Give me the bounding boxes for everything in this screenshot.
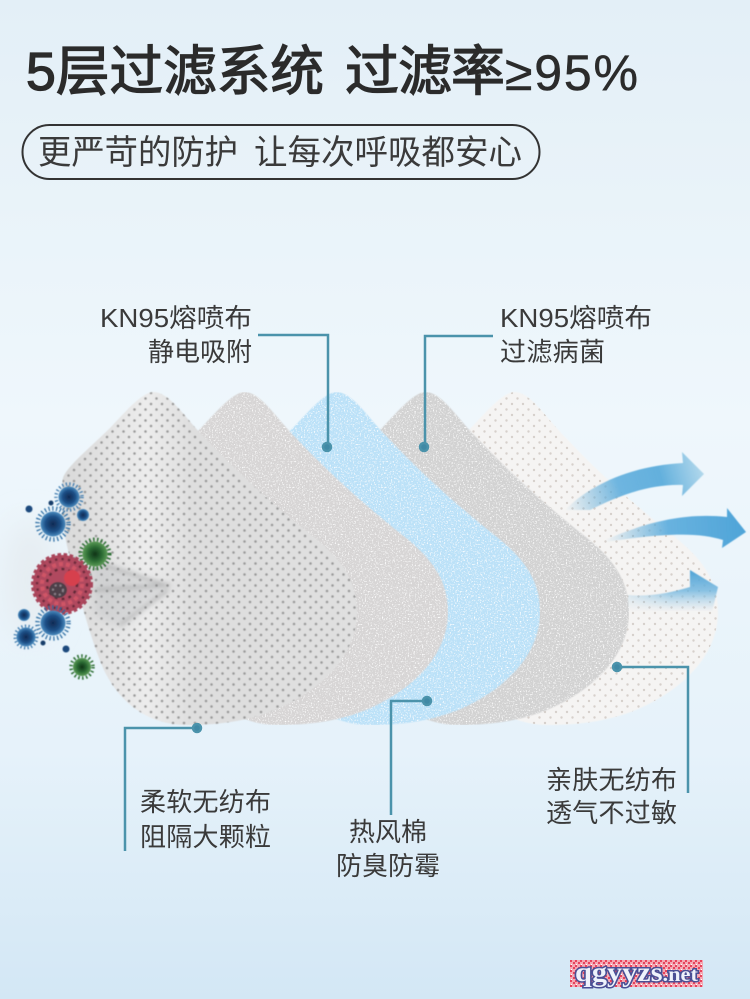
layer 4: KN95 filter xyxy=(334,392,629,725)
layer 3: hot-air cotton xyxy=(245,392,540,725)
label: KN95 filter: KN95熔喷布 xyxy=(500,303,652,333)
subtitle pill: 更严苛的防护 xyxy=(38,134,238,172)
label: skin-friendly non-woven xyxy=(546,765,677,828)
label: KN95 electrostatic: 静电吸附 xyxy=(148,337,252,367)
mask layers xyxy=(62,392,718,725)
label: hot-air cotton: 防臭防霉 xyxy=(336,851,440,881)
subtitle pill xyxy=(22,125,540,179)
connector: layer 5 xyxy=(613,663,688,793)
connector: layer 3 xyxy=(391,697,431,815)
subtitle pill: 让每次呼吸都安心 xyxy=(254,134,522,172)
layer 2: KN95 electrostatic xyxy=(153,392,448,725)
label: KN95 electrostatic xyxy=(100,303,252,367)
label: skin-friendly non-woven: 透气不过敏 xyxy=(546,798,677,828)
label: soft non-woven xyxy=(140,787,271,852)
connector: layer 1 xyxy=(125,724,201,851)
label: soft non-woven: 阻隔大颗粒 xyxy=(140,822,271,852)
label: KN95 filter xyxy=(500,303,652,367)
layer 5: skin-friendly non-woven xyxy=(423,392,718,725)
watermark: qgyyzs .net xyxy=(575,957,698,987)
arrow 2 xyxy=(605,508,746,548)
glow and shadow behind viruses xyxy=(4,520,172,640)
arrow 1 xyxy=(565,452,704,510)
connector: layer 4 xyxy=(420,336,493,451)
title xyxy=(26,42,638,102)
layer 1: soft non-woven xyxy=(62,392,357,725)
blue virus cluster top xyxy=(26,484,89,540)
label: skin-friendly non-woven: 亲肤无纺布 xyxy=(546,765,677,795)
blue virus cluster bottom xyxy=(15,608,70,652)
title: ≥95% xyxy=(505,45,638,101)
label: soft non-woven: 柔软无纺布 xyxy=(140,787,271,817)
arrow 3 xyxy=(628,570,718,612)
label: KN95 filter: 过滤病菌 xyxy=(500,337,605,367)
connector: layer 2 xyxy=(258,335,331,451)
title: 过滤率 xyxy=(345,42,505,102)
green virus top xyxy=(80,540,110,568)
viruses xyxy=(4,484,172,678)
red virus xyxy=(33,555,91,613)
label: hot-air cotton: 热风棉 xyxy=(349,817,427,847)
label: hot-air cotton xyxy=(336,817,440,881)
label: KN95 electrostatic: KN95熔喷布 xyxy=(100,303,252,333)
airflow arrows xyxy=(565,452,746,612)
green virus bottom xyxy=(71,656,93,678)
title: 5层过滤系统 xyxy=(26,42,324,102)
